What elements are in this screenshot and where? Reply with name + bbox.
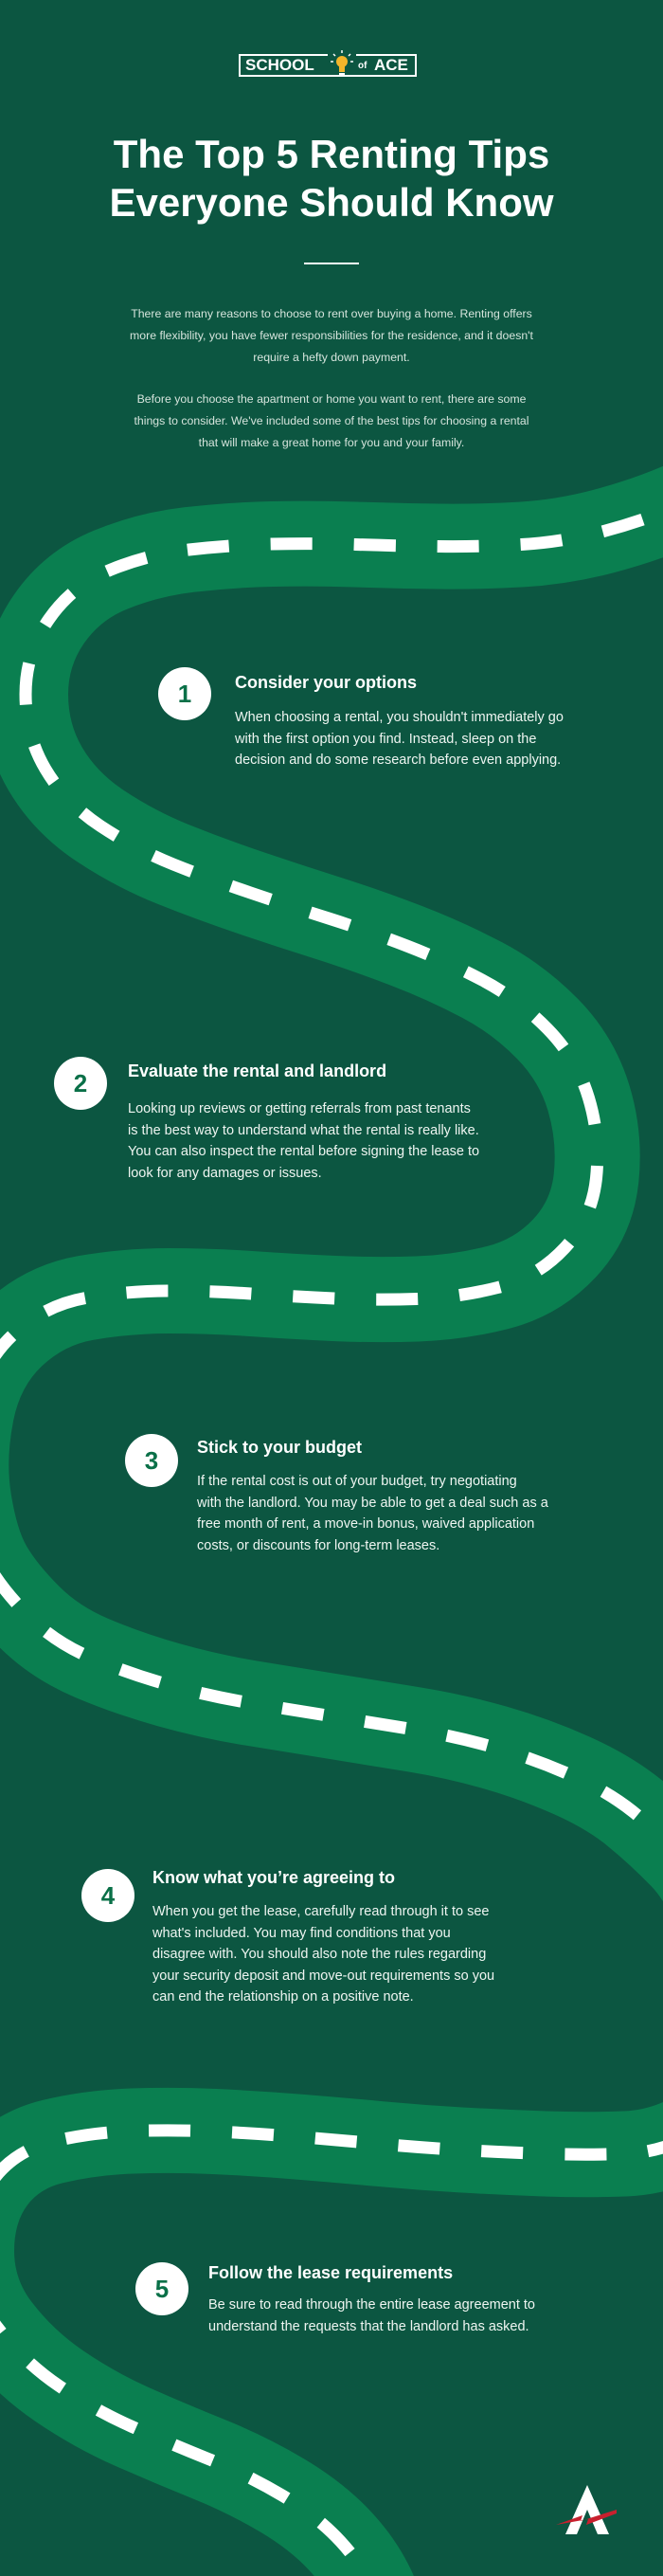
divider: [304, 263, 359, 264]
title: [109, 132, 554, 225]
logo: School of Ace: SCHOOL: [245, 56, 314, 74]
tip 2: [54, 1057, 479, 1181]
body 4: can end the relationship on a positive note.: [152, 1989, 414, 2005]
body 5: [208, 2297, 535, 2333]
logo: School of Ace: [239, 54, 417, 77]
intro paragraph 1: require a hefty down payment.: [253, 351, 410, 364]
heading 2: Evaluate the rental and landlord: [128, 1061, 386, 1080]
body 1: decision and do some research before even applying.: [235, 753, 561, 768]
number circle 5: [135, 2262, 188, 2315]
body 2: look for any damages or issues.: [128, 1166, 322, 1181]
number circle 4: [81, 1869, 134, 1922]
number circle 2: 2: [74, 1069, 87, 1098]
body 4: [152, 1904, 494, 2005]
number circle 1: 1: [178, 680, 191, 708]
number circle 1: [158, 667, 211, 720]
body 1: [235, 710, 564, 768]
tip 5: [135, 2262, 535, 2333]
heading 1: Consider your options: [235, 673, 417, 692]
body 4: disagree with. You should also note the rules regarding: [152, 1947, 486, 1962]
number circle 2: [54, 1057, 107, 1110]
body 4: When you get the lease, carefully read through it to see: [152, 1904, 489, 1919]
icon: brand A logo: [556, 2485, 617, 2534]
tip 3: [125, 1434, 548, 1552]
body 3: [197, 1474, 548, 1552]
intro paragraph 2: Before you choose the apartment or home you want to rent, there are some: [137, 392, 526, 406]
intro paragraph 2: that will make a great home for you and your family.: [199, 436, 464, 449]
intro paragraph 2: [134, 392, 529, 449]
intro paragraph 2: things to consider. We've included some of the best tips for choosing a rental: [134, 414, 529, 427]
title: Everyone Should Know: [109, 180, 554, 225]
title: The Top 5 Renting Tips: [114, 132, 549, 176]
body 4: what's included. You may find conditions that you: [152, 1926, 451, 1941]
body 4: your security deposit and move-out requirements so you: [152, 1968, 494, 1983]
number circle 3: 3: [145, 1446, 158, 1475]
intro paragraph 1: [130, 307, 533, 364]
number circle 3: [125, 1434, 178, 1487]
body 5: Be sure to read through the entire lease agreement to: [208, 2297, 535, 2313]
body 3: free month of rent, a move-in bonus, waived application: [197, 1516, 534, 1532]
heading 3: Stick to your budget: [197, 1438, 362, 1457]
body 3: with the landlord. You may be able to get a deal such as a: [197, 1496, 548, 1511]
intro paragraph 1: more flexibility, you have fewer responsibilities for the residence, and it doesn't: [130, 329, 533, 342]
body 3: If the rental cost is out of your budget, try negotiating: [197, 1474, 517, 1489]
body 3: costs, or discounts for long-term leases.: [197, 1537, 439, 1552]
tip 4: [81, 1868, 494, 2005]
body 2: Looking up reviews or getting referrals from past tenants: [128, 1101, 471, 1116]
number circle 5: 5: [155, 2275, 169, 2303]
heading 4: Know what you’re agreeing to: [152, 1868, 395, 1887]
body 2: is the best way to understand what the rental is really like.: [128, 1122, 479, 1137]
body 2: You can also inspect the rental before signing the lease to: [128, 1144, 479, 1159]
logo: School of Ace: of: [358, 61, 367, 71]
number circle 4: 4: [101, 1881, 115, 1910]
body 2: [128, 1101, 479, 1181]
body 1: with the first option you find. Instead, sleep on the: [235, 732, 536, 747]
logo: School of Ace: ACE: [374, 56, 408, 74]
body 1: When choosing a rental, you shouldn't immediately go: [235, 710, 564, 725]
heading 5: Follow the lease requirements: [208, 2263, 453, 2282]
tip 1: [158, 667, 564, 768]
intro paragraph 1: There are many reasons to choose to rent over buying a home. Renting offers: [131, 307, 532, 320]
body 5: understand the requests that the landlord has asked.: [208, 2318, 529, 2333]
